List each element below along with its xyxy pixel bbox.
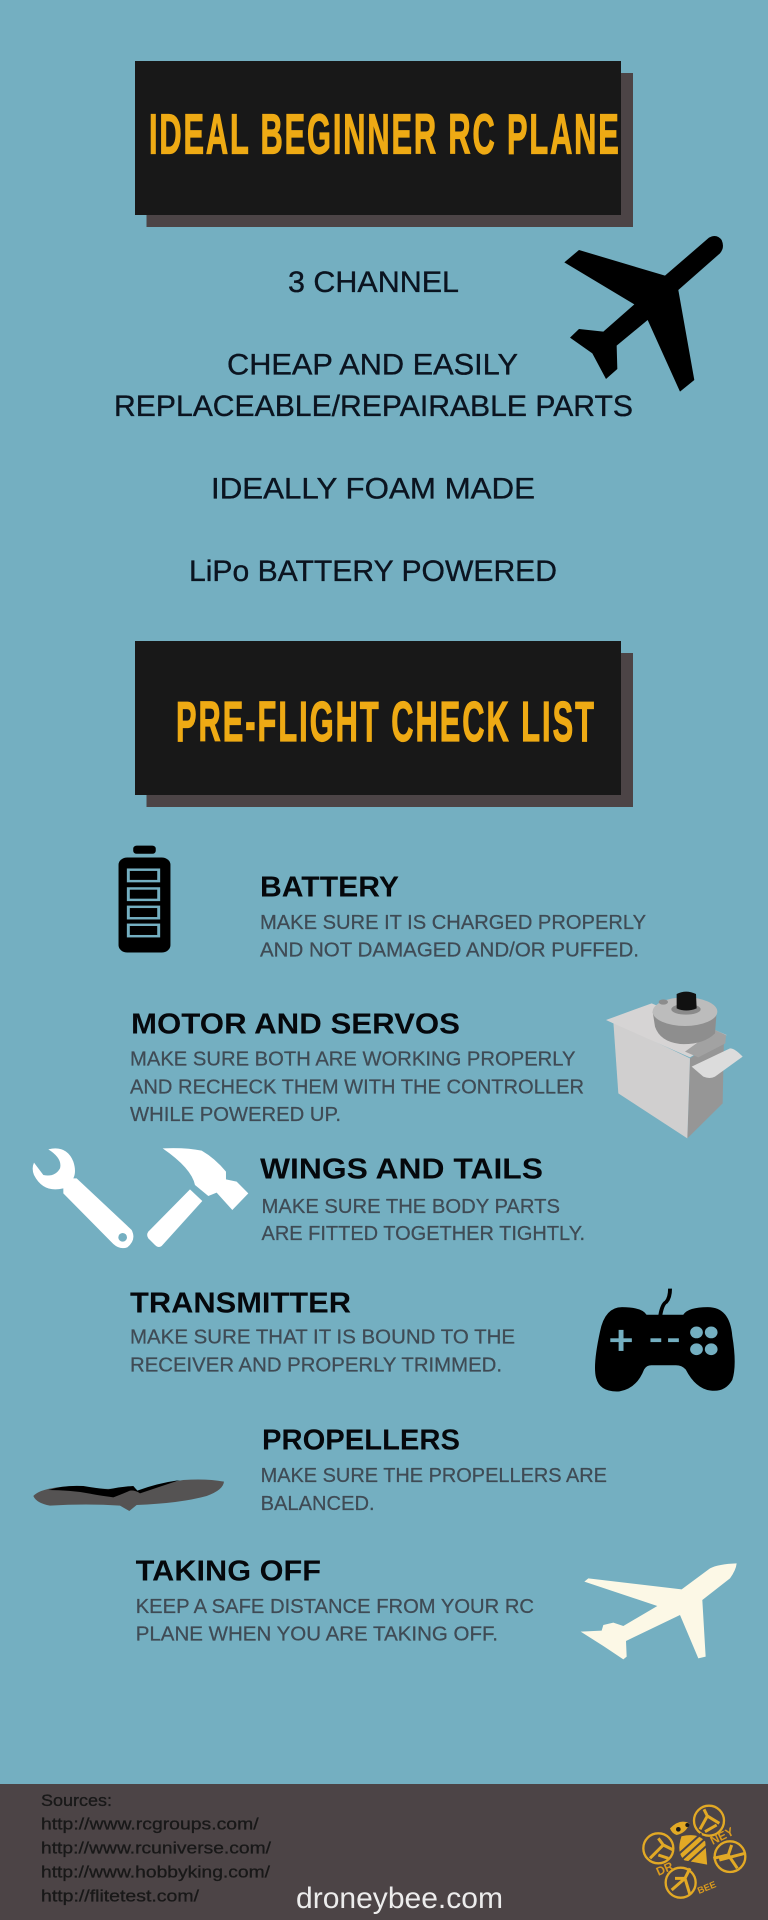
- text: motor and servos: MAKE SURE BOTH ARE WORKING PROPERLY: [130, 1048, 576, 1070]
- icon: droneybee logo: NEY: [708, 1824, 736, 1848]
- text: transmitter: MAKE SURE THAT IT IS BOUND TO THE: [130, 1325, 515, 1348]
- text: sources: http://flitetest.com/: [41, 1887, 199, 1906]
- icon: cream plane: [581, 1563, 737, 1659]
- text: motor and servos: [130, 1008, 584, 1126]
- text: battery: MAKE SURE IT IS CHARGED PROPERLY: [260, 911, 646, 934]
- text: propellers: BALANCED.: [261, 1492, 375, 1515]
- icon: droneybee logo: BEE: [696, 1879, 718, 1896]
- text: propellers: PROPELLERS: [262, 1424, 460, 1456]
- text: propellers: MAKE SURE THE PROPELLERS ARE: [261, 1464, 607, 1487]
- text block: ideal plane features: LiPo BATTERY POWERED: [189, 555, 557, 588]
- text: wings and tails: [260, 1154, 585, 1245]
- heading: pre-flight check list: PRE-FLIGHT CHECK LIST: [176, 690, 594, 753]
- text: battery: AND NOT DAMAGED AND/OR PUFFED.: [260, 938, 639, 962]
- text: website: droneybee.com: [296, 1882, 503, 1915]
- text: battery: [260, 872, 646, 962]
- text: motor and servos: AND RECHECK THEM WITH THE CONTROLLER: [130, 1075, 584, 1098]
- text: propellers: [261, 1424, 607, 1515]
- text: sources: Sources:: [41, 1791, 112, 1810]
- icon: black plane: [564, 236, 723, 392]
- icon: propeller: [33, 1479, 224, 1511]
- text block: ideal plane features: IDEALLY FOAM MADE: [211, 472, 535, 506]
- icon: game controller: [595, 1289, 735, 1391]
- text: transmitter: TRANSMITTER: [130, 1288, 351, 1320]
- text: transmitter: [130, 1288, 515, 1377]
- text: battery: BATTERY: [260, 872, 399, 904]
- heading: ideal beginner RC plane: IDEAL BEGINNER RC PLANE: [149, 102, 619, 166]
- text block: ideal plane features: [114, 266, 633, 588]
- text: taking off: KEEP A SAFE DISTANCE FROM YOUR RC: [136, 1595, 534, 1618]
- text: sources: [41, 1791, 271, 1906]
- heading: ideal beginner RC plane: [135, 61, 633, 227]
- text: wings and tails: ARE FITTED TOGETHER TIGHTLY.: [262, 1222, 585, 1245]
- text: transmitter: RECEIVER AND PROPERLY TRIMMED.: [130, 1354, 502, 1377]
- text: wings and tails: WINGS AND TAILS: [260, 1154, 543, 1186]
- icon: wrench and hammer: [33, 1148, 248, 1248]
- text: sources: http://www.rcgroups.com/: [41, 1815, 259, 1834]
- text block: ideal plane features: 3 CHANNEL: [288, 266, 459, 299]
- icon: droneybee logo: [643, 1806, 745, 1898]
- text block: ideal plane features: CHEAP AND EASILY: [227, 348, 518, 382]
- text: motor and servos: MOTOR AND SERVOS: [131, 1008, 460, 1040]
- text: sources: http://www.rcuniverse.com/: [41, 1839, 271, 1858]
- heading: pre-flight check list: [135, 641, 633, 807]
- text: wings and tails: MAKE SURE THE BODY PARTS: [262, 1195, 560, 1218]
- text: taking off: TAKING OFF: [136, 1555, 321, 1587]
- text block: ideal plane features: REPLACEABLE/REPAIRABLE PARTS: [114, 390, 633, 423]
- text: motor and servos: WHILE POWERED UP.: [130, 1103, 341, 1126]
- footer band: [0, 1784, 768, 1920]
- text: taking off: [136, 1555, 534, 1646]
- icon: battery: [119, 846, 170, 953]
- text: taking off: PLANE WHEN YOU ARE TAKING OFF.: [136, 1623, 498, 1646]
- icon: droneybee logo: DR: [654, 1859, 676, 1879]
- text: sources: http://www.hobbyking.com/: [41, 1863, 270, 1882]
- icon: servo: [606, 992, 743, 1138]
